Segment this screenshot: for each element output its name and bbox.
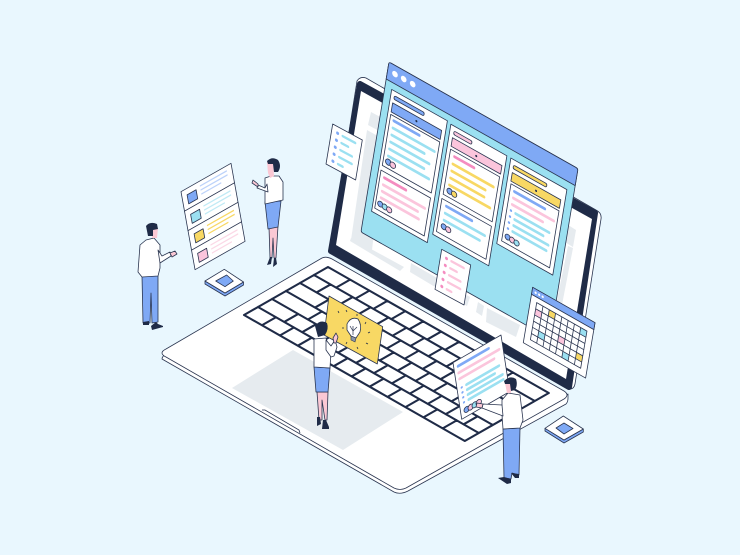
column 3 bbox=[497, 158, 567, 275]
keyboard bbox=[244, 267, 549, 441]
laptop base bbox=[162, 257, 568, 493]
calendar panel bbox=[523, 287, 595, 378]
person: man at left bbox=[138, 223, 177, 330]
card: yellow bbox=[188, 202, 242, 250]
lightbulb card bbox=[324, 296, 383, 364]
trackpad bbox=[232, 350, 403, 450]
chip tile: right bbox=[545, 416, 583, 443]
floating note: left bbox=[326, 124, 362, 180]
card: cyan bbox=[185, 183, 238, 231]
person: woman at keyboard bbox=[314, 322, 338, 429]
person: man at right bbox=[476, 377, 523, 484]
floating note: bottom bbox=[435, 249, 471, 305]
card: blue bbox=[181, 163, 235, 211]
task list cards bbox=[181, 163, 245, 270]
chip tile: left bbox=[205, 269, 244, 296]
card: pink bbox=[192, 222, 245, 270]
document panel held by man bbox=[453, 335, 510, 419]
column 2 bbox=[433, 124, 507, 266]
column 1 bbox=[372, 89, 447, 243]
person: woman at top bbox=[252, 158, 283, 267]
laptop lid bbox=[330, 77, 601, 389]
browser window bbox=[361, 62, 578, 339]
